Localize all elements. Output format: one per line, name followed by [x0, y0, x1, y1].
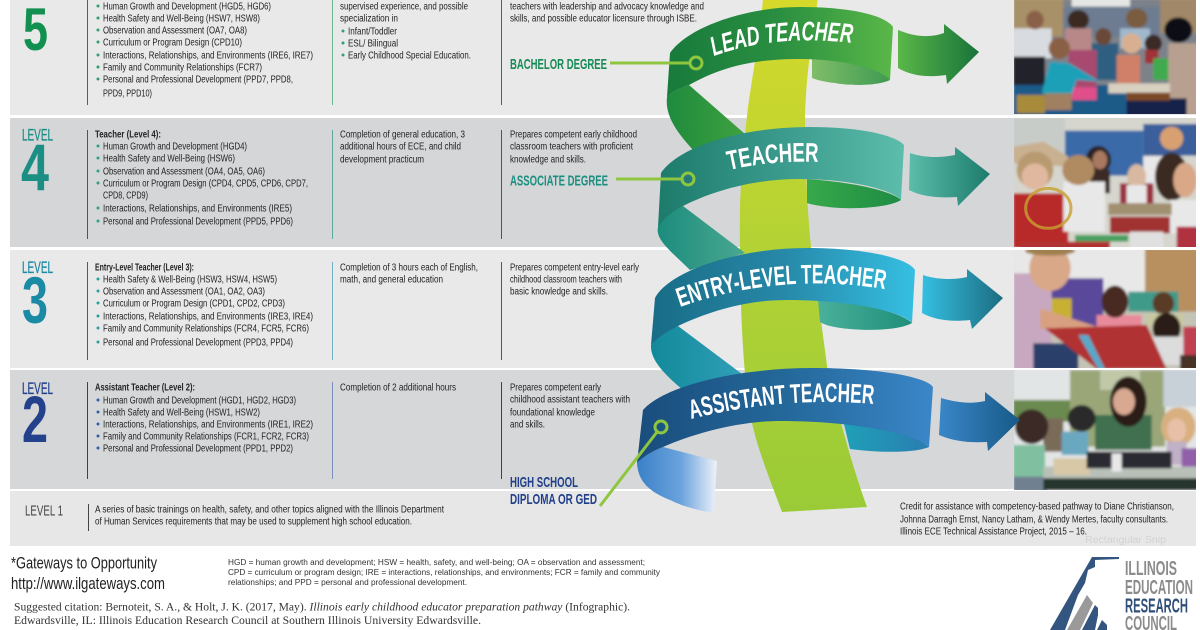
underside of teacher ribbon [807, 179, 901, 208]
high school diploma label: HIGH SCHOOL [510, 474, 578, 491]
level 2 competencies [95, 382, 313, 454]
level 2 outcome: and skills. [510, 419, 545, 430]
level 4 competencies: Teacher (Level 4): [95, 129, 161, 140]
logo mark [1050, 557, 1119, 630]
level 4 requirements [340, 129, 465, 165]
panel: level 1 row background [10, 491, 1196, 546]
level 3 competencies: Observation and Assessment (OA1, OA2, OA3) [103, 286, 265, 297]
level 4 outcome: Prepares competent early childhood [510, 129, 637, 140]
panel: level 4 row background [10, 118, 1196, 247]
arrow: lead teacher [898, 24, 979, 84]
high school diploma label: DIPLOMA OR GED [510, 491, 597, 508]
abbreviation legend: HGD = human growth and development; HSW = health, safety, and well-being; OA = observation and assessment; [228, 558, 645, 567]
level 5 requirements: Early Childhood Special Education. [348, 50, 471, 61]
vertical lime ribbon [740, 0, 867, 512]
level 2 label: LEVEL [22, 379, 53, 398]
level 1 description: A series of basic trainings on health, safety, and other topics aligned with the Illinois Department [95, 504, 444, 515]
lead teacher label: LEAD TEACHER [710, 22, 854, 56]
level 4 column dividers [88, 130, 502, 239]
level 5 requirements: supervised experience, and possible [340, 1, 468, 12]
level 2 competencies: Personal and Professional Development (PPD1, PPD2) [103, 443, 293, 454]
level 4 outcome: classroom teachers with proficient [510, 141, 633, 152]
level 2 outcome [510, 382, 630, 430]
level 3 label: LEVEL [22, 258, 53, 277]
level 4 competencies: Personal and Professional Development (PPD5, PPD6) [103, 216, 293, 227]
tail of entry-level ribbon [651, 326, 742, 390]
level 2 competencies: Family and Community Relationships (FCR1, FCR2, FCR3) [103, 431, 309, 442]
suggested citation: Suggested citation: Bernoteit, S. A., & Holt, J. K. (2017, May). Illinois early childhood educator preparation pathway (Infographic). [14, 600, 630, 614]
ribbon: lead teacher [666, 7, 893, 150]
ribbon: assistant teacher [637, 420, 929, 513]
level 2 text row [22, 379, 630, 479]
level 3 competencies: Personal and Professional Development (PPD3, PPD4) [103, 337, 293, 348]
level 4 competencies: Health Safety and Well-Being (HSW6) [103, 153, 235, 164]
assistant teacher label: ASSISTANT TEACHER [691, 383, 874, 419]
teacher ribbon band [658, 127, 904, 227]
photo: teacher classroom [1013, 117, 1200, 250]
arrow: teacher [909, 147, 990, 206]
level 2 competencies: Health Safety and Well-Being (HSW1, HSW2) [103, 407, 260, 418]
abbreviation legend [228, 558, 660, 587]
level 4 competencies: Curriculum or Program Design (CPD4, CPD5, CPD6, CPD7, [103, 178, 308, 189]
level 5 requirements: Infant/Toddler [348, 26, 398, 37]
level 5 competencies: Family and Community Relationships (FCR7) [103, 62, 262, 73]
arrow: entry-level teacher [922, 269, 1003, 329]
level 5 competencies: Interactions, Relationships, and Environments (IRE6, IRE7) [103, 50, 313, 61]
level 2 competencies: Interactions, Relationships, and Environments (IRE1, IRE2) [103, 419, 313, 430]
suggested citation: Edwardsville, IL: Illinois Education Research Council at Southern Illinois University Edwardsville. [14, 613, 481, 627]
level 3 requirements: math, and general education [340, 274, 443, 285]
level 4 competencies: Observation and Assessment (OA4, OA5, OA6) [103, 166, 265, 177]
level 5 competencies: Human Growth and Development (HGD5, HGD6) [103, 1, 271, 12]
level 4 requirements: development practicum [340, 154, 424, 165]
level 5 requirements: specialization in [340, 13, 398, 24]
level 4 requirements: additional hours of ECE, and child [340, 141, 461, 152]
level 5 competencies [96, 1, 313, 99]
footnote: gateways to opportunity [11, 554, 165, 593]
level 5 competencies: Curriculum or Program Design (CPD10) [103, 37, 242, 48]
level 1 text row [25, 502, 444, 531]
level 3 competencies: Curriculum or Program Design (CPD1, CPD2, CPD3) [103, 298, 285, 309]
faint snip watermark: Rectangular Snip [1085, 535, 1166, 546]
level 3 competencies: Health Safety & Well-Being (HSW3, HSW4, HSW5) [103, 274, 277, 285]
level 3 competencies: Entry-Level Teacher (Level 3): [95, 262, 194, 273]
abbreviation legend: CPD = curriculum or program design; IRE = interactions, relationships, and environments; FCR = family and community [228, 568, 660, 577]
footnote: gateways to opportunity: http://www.ilgateways.com [11, 574, 165, 593]
tail of assistant ribbon [637, 447, 717, 513]
photo: lead teacher classroom [1013, 0, 1200, 118]
ribbon: entry-level teacher [651, 299, 912, 390]
level 2 competencies: Assistant Teacher (Level 2): [95, 382, 195, 393]
level 2 outcome: foundational knowledge [510, 407, 595, 418]
level 3 outcome: childhood classroom teachers with [510, 274, 622, 285]
suggested citation [14, 600, 630, 627]
ribbon: teacher [658, 179, 901, 270]
level 5 text row [23, 0, 704, 105]
level 5 outcome [510, 1, 704, 24]
level 5 requirements: ESL/ Bilingual [348, 38, 398, 49]
associate degree label: ASSOCIATE DEGREE [510, 172, 608, 190]
level 4 outcome: knowledge and skills. [510, 154, 586, 165]
level 3 competencies [95, 262, 313, 348]
abbreviation legend: relationships; and PPD = personal and professional development. [228, 578, 467, 587]
connector: bachelor degree [510, 56, 702, 73]
arrow: assistant teacher [939, 392, 1020, 451]
connector: associate degree [510, 172, 694, 190]
level 1 label: LEVEL 1 [25, 502, 63, 520]
level 1 description: of Human Services requirements that may be used to supplement high school education. [95, 516, 412, 527]
level 5 competencies: Personal and Professional Development (PPD7, PPD8, [103, 74, 293, 85]
level 2 outcome: childhood assistant teachers with [510, 394, 630, 405]
photo: entry-level teacher reading [1013, 246, 1200, 370]
level 5 competencies: PPD9, PPD10) [103, 88, 152, 99]
level 3 outcome [510, 262, 639, 297]
level 4 text row [21, 126, 637, 239]
credit note: Illinois ECE Technical Assistance Project, 2015 – 16. [900, 526, 1087, 537]
panel: level 5 row background [10, 0, 1196, 115]
level 3 outcome: basic knowledge and skills. [510, 286, 608, 297]
entry-level ribbon band [651, 248, 915, 345]
level 4 number: 4 [21, 130, 49, 204]
panel: level 2 row background [10, 370, 1196, 489]
level 4 label: LEVEL [22, 126, 53, 144]
level 3 column dividers [88, 262, 502, 360]
level 3 outcome: Prepares competent entry-level early [510, 262, 639, 273]
assistant ribbon band [637, 368, 933, 463]
underside of assistant ribbon [843, 420, 929, 452]
level 5 outcome: skills, and possible educator licensure through ISBE. [510, 13, 697, 24]
level 2 column dividers [88, 382, 502, 479]
footnote: gateways to opportunity: *Gateways to Opportunity [11, 554, 157, 572]
level 4 competencies: Human Growth and Development (HGD4) [103, 141, 247, 152]
underside of entry-level ribbon [818, 299, 912, 330]
level 2 requirements: Completion of 2 additional hours [340, 382, 456, 393]
level 1 description [95, 504, 444, 527]
teacher label: TEACHER [725, 143, 818, 170]
level 3 requirements [340, 262, 478, 285]
level 4 competencies: CPD8, CPD9) [103, 190, 148, 201]
level 2 outcome: Prepares competent early [510, 382, 601, 393]
photo: assistant teacher at table [1013, 368, 1200, 492]
level 2 competencies: Human Growth and Development (HGD1, HGD2, HGD3) [103, 395, 296, 406]
underside of lead ribbon [812, 59, 890, 85]
logo: illinois education research council [1050, 557, 1193, 630]
level 3 number: 3 [22, 263, 48, 337]
connector: high school diploma [510, 421, 667, 508]
credit note [900, 501, 1174, 537]
level 4 competencies [95, 129, 308, 227]
level 4 competencies: Interactions, Relationships, and Environments (IRE5) [103, 203, 292, 214]
panel: level 3 row background [10, 250, 1196, 368]
bachelor degree label: BACHELOR DEGREE [510, 56, 607, 73]
level 4 requirements: Completion of general education, 3 [340, 129, 465, 140]
level 5 outcome: teachers with leadership and advocacy knowledge and [510, 1, 704, 12]
level 5 column dividers [88, 0, 502, 105]
level 3 competencies: Interactions, Relationships, and Environments (IRE3, IRE4) [103, 311, 313, 322]
level 3 competencies: Family and Community Relationships (FCR4, FCR5, FCR6) [103, 323, 309, 334]
lead ribbon band [667, 7, 893, 97]
tail of lead ribbon [667, 85, 745, 150]
level 5 requirements [340, 1, 471, 61]
entry-level teacher label: ENTRY-LEVEL TEACHER [675, 264, 886, 307]
level 3 requirements: Completion of 3 hours each of English, [340, 262, 478, 273]
level 2 number: 2 [22, 382, 48, 456]
level 3 text row [22, 258, 639, 360]
level 5 competencies: Observation and Assessment (OA7, OA8) [103, 25, 247, 36]
logo wordmark [1125, 558, 1193, 630]
level 4 outcome [510, 129, 637, 165]
level 5 competencies: Health Safety and Well-Being (HSW7, HSW8) [103, 13, 260, 24]
tail of teacher ribbon [658, 206, 745, 270]
